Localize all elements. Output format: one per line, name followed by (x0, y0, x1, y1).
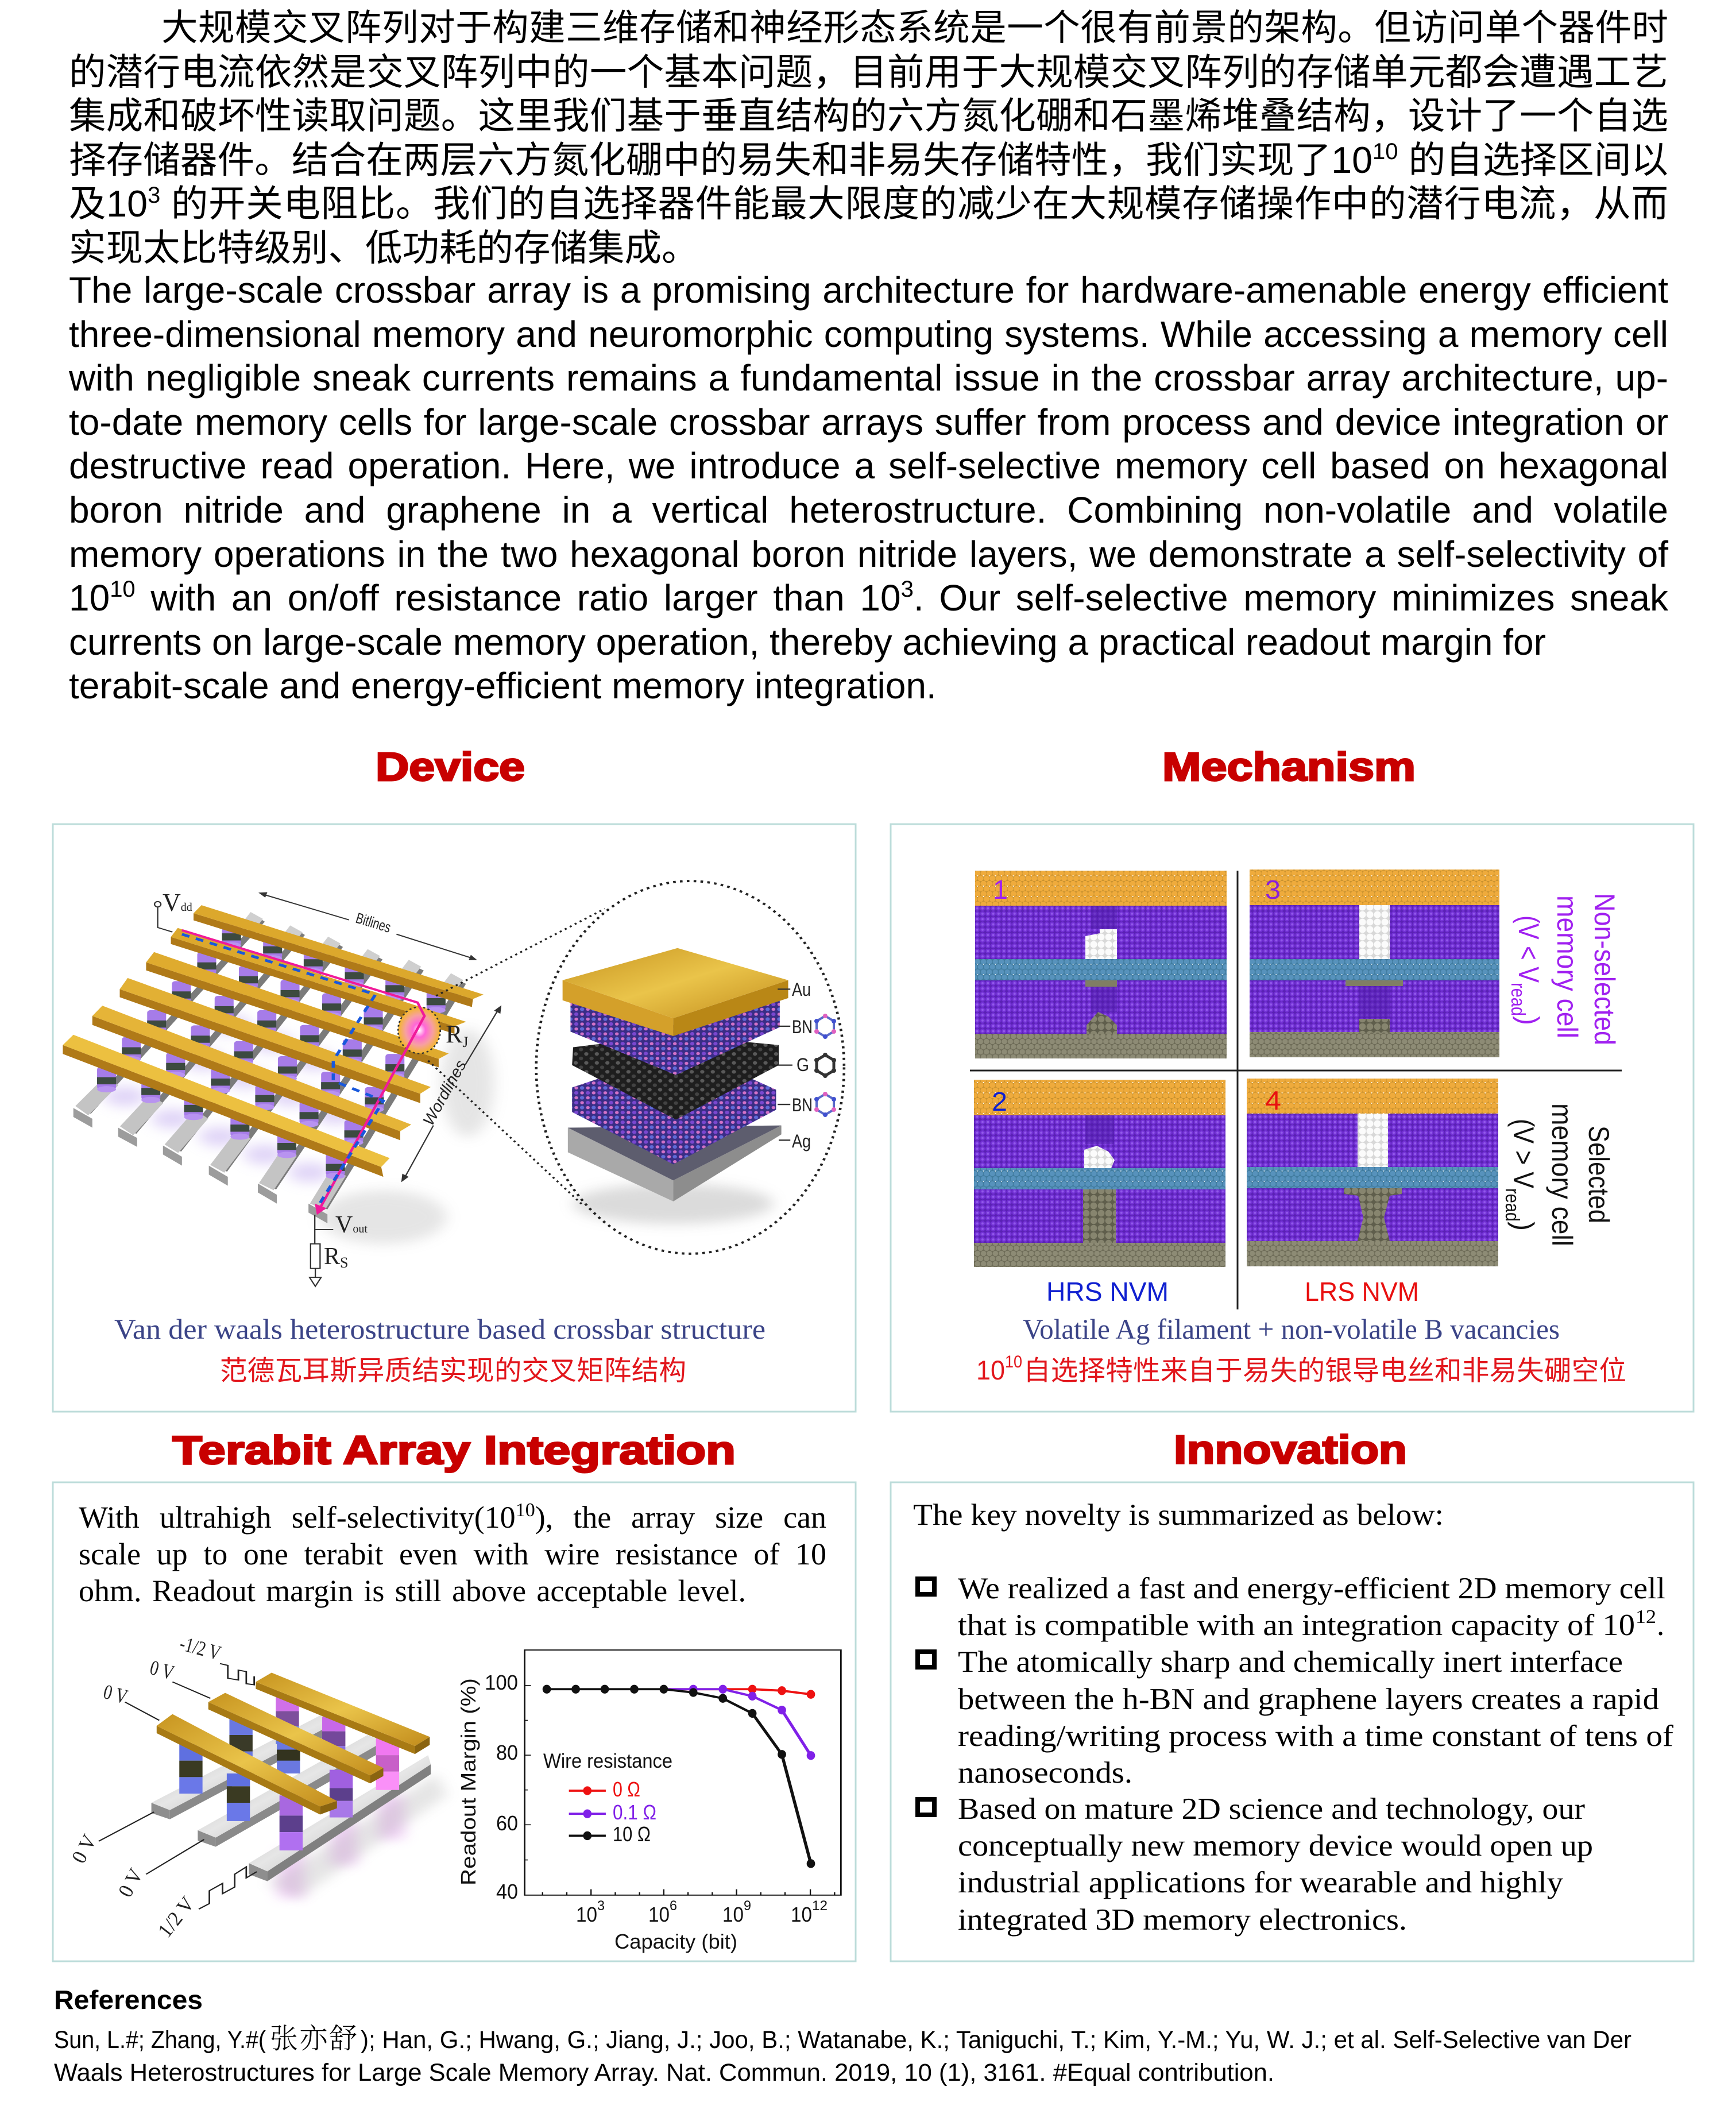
bullet: first checkbox (918, 1579, 934, 1594)
heading: Device: Device (376, 744, 525, 789)
text: English abstract: boron nitride and graphene in a vertical heterostructure. Combining non-volatile and volatile (69, 489, 1668, 531)
text: English abstract: currents on large-scale memory operation, thereby achieving a practical readout margin for (69, 621, 1546, 663)
caption: mechanism english: Volatile Ag filament + non-volatile B vacancies (1023, 1313, 1560, 1345)
labels: array voltages: 1/2 V (153, 1892, 199, 1942)
chart labels: 9 (744, 1898, 751, 1914)
text: Chinese abstract (69, 8, 1668, 269)
diagram: memory cell 1 (975, 871, 1227, 1058)
chart labels: 0 Ω (613, 1777, 640, 1801)
text: English abstract: 1010 with an on/off resistance ratio larger than 103. Our self-selective memory minimizes sneak (69, 577, 1668, 619)
chart labels: 10 (648, 1903, 670, 1926)
caption: mechanism chinese: 自选择特性来自于易失的银导电丝和非易失硼空位 (1023, 1356, 1626, 1386)
icon: BN hexagon upper (814, 1014, 836, 1039)
label: non-selected memory cell: (V < V (1513, 915, 1545, 983)
text: terabit description: ohm. Readout margin is still above acceptable level. (79, 1574, 746, 1608)
caption: mechanism chinese: 10 (976, 1355, 1005, 1385)
series: 10 ohm (543, 1685, 815, 1868)
text: second innovation point: The atomically sharp and chemically inert interface (958, 1645, 1623, 1679)
caption: device chinese: 范德瓦耳斯异质结实现的交叉矩阵结构 (220, 1356, 686, 1386)
label: selected memory cell: (V > V (1507, 1119, 1540, 1189)
text: citation (54, 2016, 1631, 2086)
text: Chinese abstract: 的潜行电流依然是交叉阵列中的一个基本问题，目前用于大规模交叉阵列的存储单元都会遭遇工艺 (69, 52, 1668, 93)
labels: array voltages: -1/2 V (177, 1632, 223, 1664)
text: Chinese abstract: 集成和破坏性读取问题。这里我们基于垂直结构的六方氮化硼和石墨烯堆叠结构，设计了一个自选 (69, 95, 1668, 137)
caption: device english: Van der waals heterostructure based crossbar structure (114, 1313, 765, 1345)
text: citation: ); Han, G.; Hwang, G.; Jiang, J.; Joo, B.; Watanabe, K.; Taniguchi, T.; Kim, Y.-M.; Yu, W. J.; et al. Self-Selective van Der (361, 2026, 1631, 2054)
label: selected memory cell: Selected (1583, 1126, 1615, 1223)
text: innovation intro: The key novelty is summarized as below: (913, 1498, 1444, 1532)
labels: cell numbers (992, 875, 1281, 1116)
text: terabit description (79, 1500, 826, 1608)
legend markers (569, 1786, 606, 1840)
diagram: memory cell 4 (1247, 1079, 1498, 1266)
heading: references: References (54, 1985, 203, 2015)
pillars: back row (276, 1697, 399, 1790)
chart labels: Capacity (bit) (614, 1930, 737, 1953)
icon: BN hexagon lower (814, 1092, 836, 1117)
labels: array voltages (67, 1632, 223, 1942)
panel: mechanism frame (891, 824, 1694, 1412)
text: first innovation point (958, 1572, 1665, 1642)
text: first innovation point: 12 (1636, 1606, 1656, 1628)
labels: device diagram: Vout (335, 1212, 368, 1238)
labels: cell numbers: 3 (1265, 875, 1281, 905)
chart labels: 100 (485, 1671, 518, 1694)
labels: device diagram: S (340, 1254, 348, 1271)
text: first innovation point: that is compatible with an integration capacity of 10 (958, 1609, 1635, 1642)
text: Chinese abstract: 实现太比特级别、低功耗的存储集成。 (69, 227, 699, 269)
chart labels: 12 (812, 1898, 828, 1914)
text: Chinese abstract: 大规模交叉阵列对于构建三维存储和神经形态系统是一个很有前景的架构。但访问单个器件时 (161, 8, 1668, 48)
text: English abstract: to-date memory cells for large-scale crossbar arrays suffer from process and device integration or (69, 401, 1668, 443)
caption: mechanism chinese: 10 (1005, 1353, 1022, 1371)
labels: device diagram: Wordlines (419, 1057, 470, 1129)
label: selected memory cell: read (1501, 1188, 1523, 1222)
heading: Terabit Array Integration: Terabit Array Integration (172, 1428, 736, 1473)
label: selected memory cell: memory cell (1546, 1103, 1578, 1246)
diagram: memory cell 2 (974, 1080, 1225, 1267)
text: Chinese abstract: 择存储器件。结合在两层六方氮化硼中的易失和非易失存储特性，我们实现了1010 的自选择区间以 (69, 139, 1668, 181)
diagram: quadrant divider lines (970, 871, 1622, 1309)
text: third innovation point: conceptually new memory device would open up (958, 1829, 1593, 1862)
text: English abstract: memory operations in the two hexagonal boron nitride layers, we demonstrate a self-selectivity of (69, 534, 1668, 575)
chart labels: 3 (597, 1898, 605, 1914)
labels: device diagram: Ag (792, 1131, 811, 1151)
labels: cell numbers: 4 (1265, 1085, 1281, 1115)
chart labels (457, 1671, 828, 1953)
series: 0.1 ohm (664, 1685, 815, 1760)
label: non-selected memory cell: memory cell (1551, 895, 1583, 1038)
diagram: crossbar array (63, 892, 501, 1286)
text: first innovation point: . (1657, 1609, 1664, 1642)
labels: device diagram: BN (792, 1095, 813, 1115)
series: 0 ohm (664, 1685, 815, 1699)
panel: device frame (53, 824, 856, 1412)
chart labels: 10 Ω (613, 1822, 651, 1846)
label: selected memory cell (1501, 1103, 1615, 1246)
labels: device diagram: Bitlines (354, 909, 393, 936)
panel: innovation frame (891, 1482, 1694, 1961)
chart labels: 10 (791, 1903, 812, 1926)
text: second innovation point (958, 1645, 1673, 1790)
text: English abstract: The large-scale crossbar array is a promising architecture for hardware-amenable energy efficient (69, 269, 1668, 311)
text: citation: Sun, L.#; Zhang, Y.#( (54, 2026, 266, 2054)
text: citation: Waals Heterostructures for Large Scale Memory Array. Nat. Commun. 2019, 10 (1), 3161. #Equal contribution. (54, 2059, 1274, 2086)
chart labels: Readout Margin (%) (457, 1678, 480, 1885)
text: second innovation point: nanoseconds. (958, 1756, 1132, 1790)
bullet: third checkbox (918, 1799, 934, 1815)
label: non-selected memory cell (1507, 893, 1621, 1045)
text: English abstract: with negligible sneak currents remains a fundamental issue in the crossbar array architecture, up- (69, 357, 1668, 399)
pillars: middle row (229, 1718, 353, 1818)
labels: array voltages: 0 V (114, 1865, 148, 1901)
chart labels: 60 (496, 1811, 518, 1835)
labels: device diagram: G (797, 1054, 809, 1075)
text: English abstract (69, 269, 1669, 706)
heading: Mechanism: Mechanism (1162, 744, 1416, 789)
diagram: terabit 3D array (99, 1664, 447, 1909)
diagram: memory cell 3 (1250, 870, 1499, 1057)
diagram: layer stack zoom circle (428, 881, 844, 1254)
text: citation: 张亦舒 (270, 2016, 357, 2057)
chart labels: 10 (722, 1903, 744, 1926)
text: third innovation point (958, 1792, 1593, 1937)
label: HRS NVM: HRS NVM (1046, 1277, 1169, 1307)
chart labels: 10 (576, 1903, 597, 1926)
chart: readout margin vs capacity (457, 1650, 841, 1953)
label: non-selected memory cell: ) (1513, 1016, 1545, 1025)
bullet: second checkbox (918, 1652, 934, 1667)
text: third innovation point: industrial applications for wearable and highly (958, 1866, 1564, 1899)
text: second innovation point: between the h-BN and graphene layers creates a rapid (958, 1683, 1659, 1716)
text: terabit description: scale up to one terabit even with wire resistance of 10 (79, 1537, 826, 1571)
labels: device diagram (163, 888, 813, 1271)
chart labels: 0.1 Ω (613, 1800, 656, 1824)
icon: graphene hexagon (814, 1053, 836, 1078)
labels: array voltages: 0 V (67, 1831, 101, 1867)
labels: cell numbers: 2 (992, 1087, 1007, 1116)
text: English abstract: terabit-scale and energy-efficient memory integration. (69, 665, 937, 706)
text: English abstract: destructive read operation. Here, we introduce a self-selective memory cell based on hexagonal (69, 445, 1668, 486)
labels: device diagram: Au (792, 979, 811, 1000)
text: third innovation point: integrated 3D memory electronics. (958, 1903, 1407, 1937)
heading: Innovation: Innovation (1174, 1427, 1407, 1472)
panel: terabit array frame (53, 1482, 856, 1961)
text: English abstract: three-dimensional memory and neuromorphic computing systems. While accessing a memory cell (69, 314, 1668, 355)
text: Chinese abstract: 及103 的开关电阻比。我们的自选择器件能最大限度的减少在大规模存储操作中的潜行电流，从而 (69, 183, 1668, 225)
text: second innovation point: reading/writing process with a time constant of tens of (958, 1719, 1673, 1753)
text: first innovation point: We realized a fast and energy-efficient 2D memory cell (958, 1572, 1665, 1605)
labels: device diagram: R (446, 1020, 462, 1048)
labels: device diagram: J (462, 1034, 468, 1050)
text: terabit description: With ultrahigh self-selectivity(1010), the array size can (79, 1500, 826, 1535)
chart labels: 80 (496, 1741, 518, 1764)
labels: device diagram: BN (792, 1017, 813, 1037)
labels: device diagram: Vdd (163, 888, 192, 917)
label: LRS NVM: LRS NVM (1305, 1277, 1419, 1307)
label: non-selected memory cell: Non-selected (1588, 893, 1621, 1045)
chart labels: 40 (496, 1880, 518, 1903)
labels: array voltages: 0 V (101, 1680, 130, 1709)
labels: device diagram: R (324, 1243, 340, 1270)
label: selected memory cell: ) (1507, 1222, 1540, 1231)
label: non-selected memory cell: read (1507, 983, 1529, 1016)
chart labels: Wire resistance (543, 1750, 672, 1772)
chart labels: 6 (670, 1898, 677, 1914)
pillars: front row (179, 1744, 303, 1850)
labels: cell numbers: 1 (993, 875, 1008, 905)
labels: array voltages: 0 V (148, 1656, 177, 1684)
text: third innovation point: Based on mature 2D science and technology, our (958, 1792, 1585, 1826)
